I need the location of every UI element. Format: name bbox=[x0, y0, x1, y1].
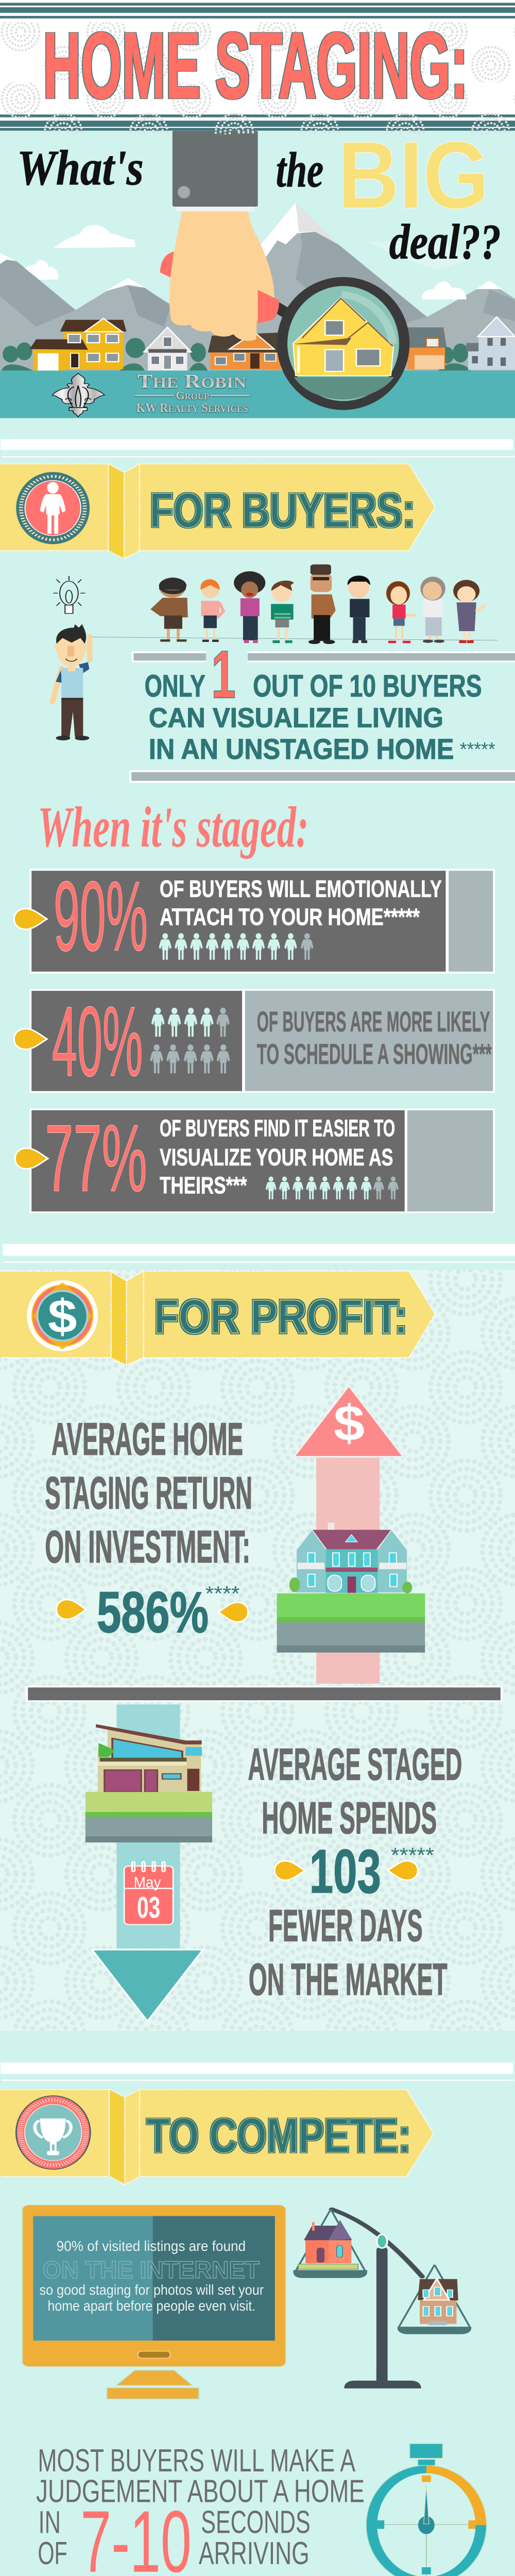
stat: 1 out of 10 buyers bbox=[145, 637, 495, 765]
section: hero text bbox=[17, 14, 501, 269]
section: for profit: AVERAGE HOME bbox=[52, 1414, 243, 1465]
logo text bbox=[134, 370, 250, 415]
monitor: home apart before people even visit. bbox=[47, 2298, 255, 2314]
arrow: down shaft bbox=[92, 1704, 203, 2021]
section: when it's staged bbox=[14, 795, 495, 1213]
icon: dollar emblem bbox=[27, 1280, 98, 1351]
icon: trophy emblem bbox=[16, 2096, 90, 2170]
panel: 90 percent bbox=[14, 861, 495, 974]
arrow: up shaft bbox=[294, 1386, 403, 1684]
house: orange bbox=[208, 332, 282, 370]
logo text: KW REALTY SERVICES bbox=[136, 401, 248, 415]
text: most buyers judgement: IN bbox=[39, 2504, 61, 2540]
heading: when it's staged: When it's staged: bbox=[38, 795, 308, 859]
panel: 77 percent bbox=[15, 1105, 495, 1213]
balance scale base bbox=[344, 2370, 421, 2388]
text: most buyers judgement: SECONDS bbox=[201, 2504, 311, 2540]
icon: tan house bbox=[418, 2279, 458, 2325]
section: seconds stat and footer bbox=[36, 2370, 487, 2576]
panel: 77 percent: VISUALIZE YOUR HOME AS bbox=[160, 1144, 393, 1171]
heading: for profit: FOR PROFIT: bbox=[154, 1290, 407, 1344]
text: average ROI bbox=[45, 1414, 252, 1572]
line from man to people bbox=[91, 637, 497, 640]
divider bars bbox=[1, 2062, 514, 2081]
panel: 40 percent: 40% bbox=[52, 986, 143, 1097]
icon: magnifying glass with house bbox=[258, 281, 404, 405]
icon: hand with sleeve bbox=[160, 131, 274, 341]
section: to compete bbox=[0, 2062, 514, 2388]
stat: 103 days: ***** bbox=[391, 1844, 434, 1867]
logo text: GROUP bbox=[176, 389, 209, 402]
subtitle: What's: What's bbox=[17, 140, 144, 195]
header dot pattern bbox=[0, 22, 515, 134]
icon: modern house on platform bbox=[85, 1724, 212, 1842]
house: yellow two-storey bbox=[29, 318, 127, 370]
section: for profit: STAGING RETURN bbox=[45, 1468, 252, 1518]
icon: calendar May 03 bbox=[124, 1862, 173, 1924]
scene: mountains bbox=[0, 202, 515, 371]
arrow: up shaft: $ bbox=[334, 1395, 365, 1451]
header band bbox=[0, 0, 515, 131]
figure: man with raised arm bbox=[53, 624, 92, 740]
text: most buyers judgement: OF bbox=[38, 2535, 67, 2571]
section: hero bbox=[0, 0, 515, 418]
monitor: so good staging for photos will set your bbox=[40, 2282, 264, 2298]
stat: 586 percent: 586% bbox=[97, 1580, 209, 1645]
stat: 1 out of 10 buyers: ONLY bbox=[145, 669, 205, 703]
monitor: ON THE INTERNET bbox=[43, 2257, 260, 2283]
house: grey bbox=[144, 327, 191, 370]
section: for profit bbox=[0, 1244, 515, 1684]
icon: orange house bbox=[298, 2220, 358, 2269]
panel: 40 percent bbox=[14, 986, 495, 1097]
scene: trees bbox=[2, 338, 471, 370]
monitor bbox=[22, 2205, 286, 2367]
icon: calendar May 03: 03 bbox=[137, 1891, 160, 1924]
stat: 1 out of 10 buyers: ***** bbox=[460, 738, 495, 760]
house: blue bbox=[467, 317, 515, 370]
text: average staged home bbox=[248, 1739, 462, 2004]
icon: person emblem bbox=[16, 472, 90, 544]
section background: for profit bbox=[0, 1270, 515, 2031]
icon: dollar emblem: $ bbox=[48, 1290, 77, 1343]
section: days on market bbox=[26, 1686, 503, 2021]
panel: 90 percent: 90% bbox=[54, 861, 148, 972]
icon: mansion on platform bbox=[277, 1523, 425, 1653]
monitor: 90% of visited listings are found bbox=[57, 2238, 246, 2254]
panel: 77 percent: 77% bbox=[45, 1105, 147, 1211]
divider bar bbox=[26, 1686, 503, 1702]
monitor stand bbox=[107, 2370, 199, 2399]
icon: stopwatch bbox=[366, 2444, 487, 2576]
panel: 77 percent: THEIRS*** bbox=[160, 1173, 247, 1199]
text: most buyers judgement: ARRIVING bbox=[199, 2535, 310, 2571]
logo text: THE ROBIN bbox=[138, 370, 246, 392]
balance scale bbox=[294, 2209, 471, 2388]
subtitle: the: the bbox=[276, 142, 323, 197]
icon: logo fleur-de-lis bbox=[52, 374, 105, 417]
figures: group of nine buyers bbox=[150, 565, 486, 644]
scene: ground bbox=[0, 370, 515, 418]
banner: for profit bbox=[0, 1271, 435, 1365]
stat: 103 days: 103 bbox=[310, 1837, 381, 1906]
banner: for buyers bbox=[0, 464, 435, 558]
stat: 1 out of 10 buyers: 1 bbox=[211, 637, 236, 713]
grey bars bbox=[129, 651, 515, 783]
icon: calendar May 03: May bbox=[134, 1874, 161, 1891]
icon: light bulb bbox=[53, 576, 85, 614]
house: orange and slate, right bbox=[407, 327, 447, 369]
divider bars bbox=[1, 439, 515, 457]
divider bars bbox=[3, 1244, 515, 1263]
stat: 586 percent: **** bbox=[205, 1582, 240, 1605]
banner: to compete bbox=[0, 2090, 434, 2184]
scene: clouds bbox=[25, 225, 470, 299]
section: for buyers bbox=[0, 439, 515, 783]
text: most buyers judgement bbox=[36, 2443, 365, 2571]
section: for profit: ON INVESTMENT: bbox=[45, 1521, 250, 1572]
